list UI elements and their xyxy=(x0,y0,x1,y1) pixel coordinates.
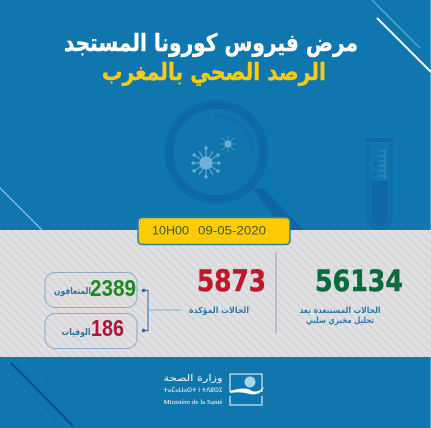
number: excluded cases: 56134 xyxy=(315,264,403,298)
gray data band xyxy=(0,230,431,357)
panel: recovered xyxy=(45,272,137,308)
panel: excluded cases: تحليل مخبري سلبي xyxy=(306,316,374,326)
date badge xyxy=(138,218,290,244)
icon: small virus xyxy=(220,136,236,152)
right edge stripe xyxy=(430,0,431,428)
label: recovered: المتعافون xyxy=(54,287,91,297)
date badge: 09-05-2020 xyxy=(198,226,266,238)
label: confirmed cases: الحالات المؤكدة xyxy=(189,306,249,316)
icon: test tube xyxy=(365,138,394,230)
icon: ministry emblem xyxy=(230,374,264,405)
text: ministry name xyxy=(164,374,223,406)
icon: large virus xyxy=(192,147,220,178)
date badge: 10H00 xyxy=(152,226,189,238)
panel: deaths xyxy=(45,314,137,348)
label: excluded cases: الحالات المستبعدة بعد xyxy=(300,306,381,316)
divider xyxy=(275,252,277,333)
number: recovered: 2389 xyxy=(90,275,136,301)
decorative corner lines xyxy=(0,0,431,230)
number: confirmed cases: 5873 xyxy=(197,264,266,298)
heading: white title line: مرض فيروس كورونا المستجد xyxy=(64,29,358,57)
icon: magnifying glass with virus xyxy=(169,104,304,230)
text: ministry name: ⵜⴰⵎⴰⵡⴰⵙⵜ ⵏ ⵜⴷⵓⵙⵉ xyxy=(164,387,223,394)
title xyxy=(64,29,358,86)
heading: yellow subtitle line: الرصد الصحي بالمغرب xyxy=(102,58,326,86)
bracket connector xyxy=(142,289,181,332)
dark diagonal lines bottom left xyxy=(0,358,73,426)
number: deaths: 186 xyxy=(91,315,124,341)
text: ministry name: Ministère de la Santé xyxy=(164,399,223,406)
text: ministry name: وزارة الصحة xyxy=(164,374,222,384)
label: deaths: الوفيات xyxy=(62,328,90,338)
panel: excluded cases xyxy=(300,264,403,326)
panel: confirmed cases xyxy=(189,264,266,316)
ministry logo xyxy=(164,374,264,406)
